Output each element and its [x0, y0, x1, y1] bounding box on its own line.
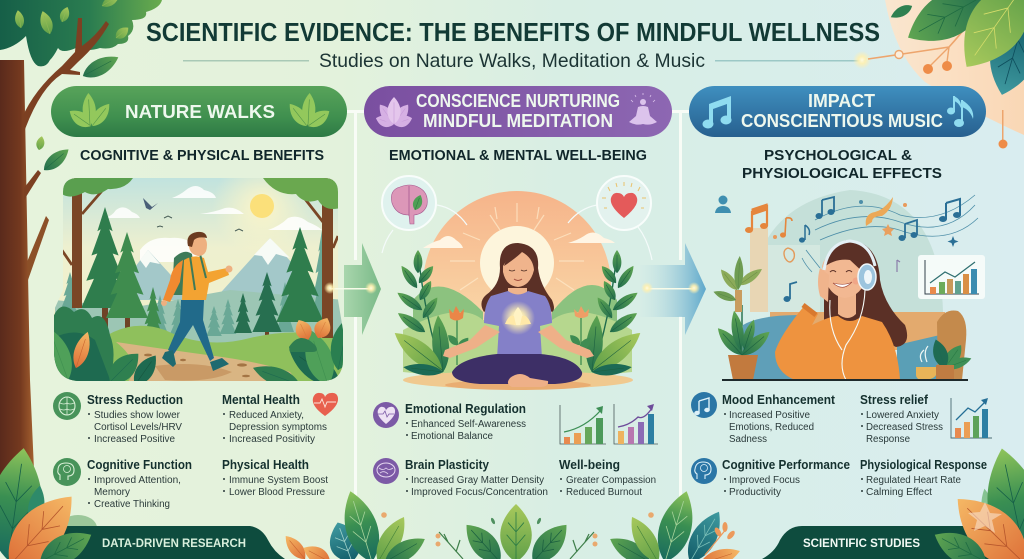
text: mood enhancement: Increased Positive [729, 410, 810, 421]
decoration: bottom-left leaves over banner [0, 482, 98, 559]
text: brain plasticity: Brain Plasticity [405, 458, 489, 472]
decoration: bottom-center foliage [281, 487, 742, 559]
illustration: hiker [161, 232, 232, 371]
illustration: music scene [712, 190, 985, 381]
banner: data-driven research: DATA-DRIVEN RESEARCH [102, 536, 246, 550]
illustration: left plant [389, 250, 451, 378]
text: mood enhancement: Sadness [729, 434, 767, 445]
pill header: music: CONSCIENTIOUS MUSIC [741, 111, 943, 131]
icon: brain circle [373, 458, 399, 484]
chart: purple growth [614, 404, 658, 444]
panel: nature walks findings [53, 392, 338, 510]
illustration: meditation scene [389, 191, 646, 390]
text: cognitive function: Memory [94, 487, 130, 498]
text: stress reduction [87, 393, 183, 445]
heading: psychological and physiological effects [742, 148, 942, 182]
text: emotional regulation: Emotional Regulation [405, 402, 526, 416]
text: stress relief: Response [866, 434, 910, 445]
icon: heart circle [373, 402, 399, 428]
illustration: right plant [584, 250, 646, 378]
text: mood enhancement: Emotions, Reduced [729, 422, 814, 433]
text: mood enhancement: Mood Enhancement [722, 393, 836, 407]
text: well-being [559, 458, 656, 498]
text: cognitive performance [722, 458, 850, 498]
text: emotional regulation: Emotional Balance [411, 431, 493, 442]
white panel dividers [347, 110, 689, 516]
illustration: woman with headphones [775, 240, 907, 380]
heading: psychological and physiological effects: PHYSIOLOGICAL EFFECTS [742, 166, 942, 182]
arrow: meditation to music [640, 243, 706, 335]
text: stress relief [860, 393, 943, 445]
pill header: nature walks: NATURE WALKS [125, 102, 275, 122]
text: cognitive function: Improved Attention, [94, 475, 181, 486]
text: cognitive performance: Improved Focus [729, 475, 800, 486]
text: stress reduction: Studies show lower [94, 410, 181, 421]
text: physical health: Lower Blood Pressure [229, 487, 325, 498]
text: brain plasticity: Improved Focus/Concentration [411, 487, 548, 498]
text: physiological response: Regulated Heart Rate [866, 475, 961, 486]
decoration: bottom-right foliage [928, 443, 1024, 559]
icon: person [715, 196, 731, 213]
icon: lotus [374, 97, 414, 129]
icon: head circle [691, 458, 717, 484]
text: cognitive performance: Cognitive Performance [722, 458, 850, 472]
text: physical health: Immune System Boost [229, 475, 328, 486]
text: stress reduction: Increased Positive [94, 434, 175, 445]
text: mental health: Depression symptoms [229, 422, 327, 433]
text: physiological response: Calming Effect [866, 487, 932, 498]
chart: stress relief trend [951, 398, 992, 438]
text: mental health: Mental Health [222, 393, 300, 407]
icon: heart pulse [313, 393, 338, 416]
arrow: nature to meditation [324, 243, 381, 335]
pill header: meditation: CONSCIENCE NURTURING [416, 91, 620, 111]
text: emotional regulation: Enhanced Self-Awareness [411, 419, 526, 430]
text: mood enhancement [722, 393, 836, 445]
icon: meditating figure [629, 93, 657, 125]
decoration: top-right branch and leaves [868, 0, 1024, 148]
icon: right leaves [285, 93, 333, 131]
icon: right notes [947, 96, 973, 127]
text: well-being: Greater Compassion [566, 475, 656, 486]
text: stress reduction: Stress Reduction [87, 393, 183, 407]
text: stress reduction: Cortisol Levels/HRV [94, 422, 182, 433]
pill header: music [689, 86, 986, 137]
text: physiological response [860, 458, 987, 498]
pill header: nature walks [51, 86, 347, 137]
text: emotional regulation [405, 402, 526, 442]
pill header: meditation [364, 86, 672, 137]
icon: left note [702, 96, 732, 128]
icon: left leaves [66, 93, 114, 131]
text: well-being: Well-being [559, 458, 620, 472]
heading: psychological and physiological effects: PSYCHOLOGICAL & [764, 148, 913, 164]
illustration: meditating woman [443, 243, 594, 387]
icon: brain circle [53, 392, 81, 420]
title: SCIENTIFIC EVIDENCE: THE BENEFITS OF MINDFUL WELLNESS [146, 17, 880, 47]
text: mental health: Increased Positivity [229, 434, 315, 445]
illustration: sofa [743, 310, 966, 380]
icon: note circle [691, 392, 717, 418]
chart: music scene card [918, 255, 985, 299]
text: stress relief: Stress relief [860, 393, 929, 407]
decoration: bottom-left foliage [0, 444, 97, 559]
illustration: flowers [446, 306, 593, 365]
text: brain plasticity [405, 458, 548, 498]
panel: music findings [691, 392, 992, 498]
text: cognitive function: Cognitive Function [87, 458, 192, 472]
text: physical health [222, 458, 328, 498]
heading: emotional and mental well-being: EMOTIONAL & MENTAL WELL-BEING [389, 148, 647, 164]
text: cognitive function [87, 458, 192, 510]
text: mental health [222, 393, 327, 445]
icon: brain badge [382, 176, 467, 253]
icon: heart badge [568, 176, 652, 260]
illustration: nature walk scene [54, 178, 343, 381]
text: physical health: Physical Health [222, 458, 309, 472]
banner: scientific studies [762, 526, 1005, 559]
decoration: left tree [0, 0, 162, 510]
pill header: music: IMPACT [808, 91, 875, 111]
text: well-being: Reduced Burnout [566, 487, 642, 498]
text: brain plasticity: Increased Gray Matter Density [411, 475, 544, 486]
subtitle: Studies on Nature Walks, Meditation & Music [319, 50, 705, 72]
icon: head circle [53, 458, 81, 486]
heading: cognitive and physical benefits: COGNITIVE & PHYSICAL BENEFITS [80, 148, 324, 164]
chart: green growth [560, 405, 606, 444]
pill header: meditation: MINDFUL MEDITATION [423, 111, 613, 131]
illustration: mug and small plant [916, 337, 973, 380]
text: mental health: Reduced Anxiety, [229, 410, 304, 421]
illustration: potted plant [712, 256, 774, 380]
subtitle rules [183, 51, 871, 69]
text: physiological response: Physiological Response [860, 458, 987, 472]
text: stress relief: Decreased Stress [866, 422, 943, 433]
text: stress relief: Lowered Anxiety [866, 410, 939, 421]
banner: data-driven research [56, 526, 285, 559]
panel: meditation findings [373, 402, 658, 498]
illustration: musical notes [802, 195, 978, 272]
text: cognitive function: Creative Thinking [94, 499, 170, 510]
banner: scientific studies: SCIENTIFIC STUDIES [803, 536, 920, 550]
text: cognitive performance: Productivity [729, 487, 781, 498]
